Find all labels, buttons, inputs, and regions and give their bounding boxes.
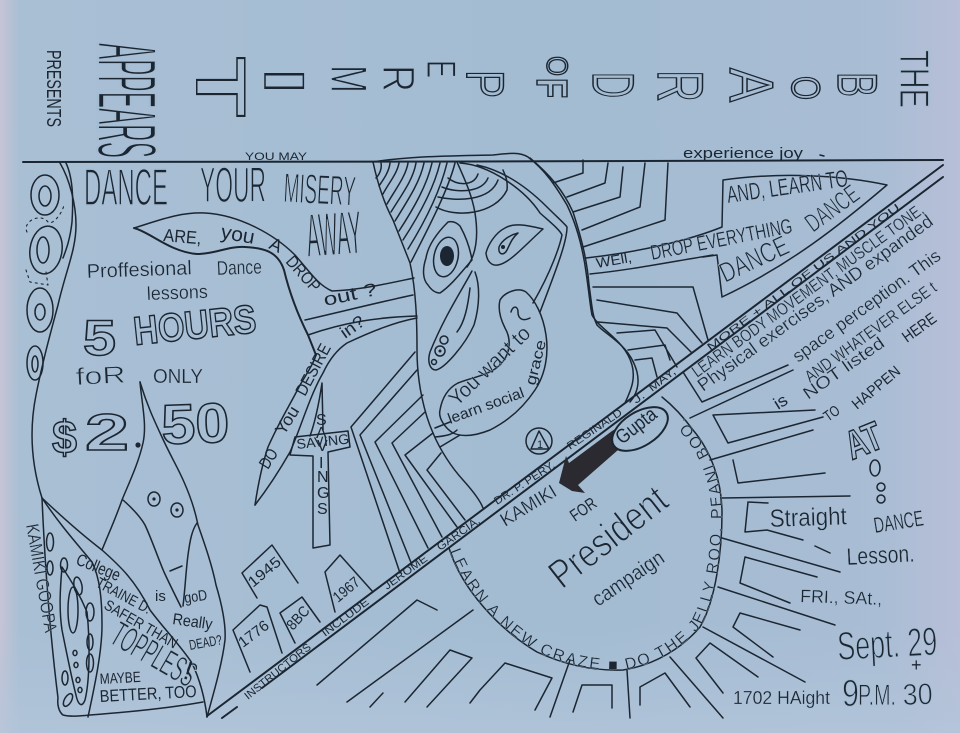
heading: dance your misery away [84,157,364,271]
arrow banner: and learn to dance dance: DANCE [714,229,794,288]
text: for only: foR [75,361,126,391]
face: contour [373,153,638,508]
fish-shaped banner: are you a drop out: ARE, [163,225,202,248]
text: is god really dead [155,587,223,653]
title: The Board of Permit Appears, written sideways: R [373,65,424,92]
text: straight dance lesson: Lesson. [846,540,915,571]
text: is god really dead: Really [171,611,213,634]
text: presents: PRESENTS [42,50,64,127]
text: straight dance lesson: Straight [769,502,847,533]
lines from blob to chin [435,422,460,447]
heading: dance your misery away: DANCE [84,159,168,217]
triangle panel with pods and text: College [74,550,123,585]
triangle panel with pods and text: MAYBE [99,669,141,688]
text: dates and address: 1702 HAight [733,688,830,708]
text: 5 hours: 5 [83,310,116,366]
fish-shaped banner: are you a drop out: DROP [282,252,324,296]
text: 5 hours [83,297,258,366]
diagonal band outline [207,165,943,718]
triangle panel with pods and text: TRAINE D. [93,575,154,618]
face: left eye [424,222,472,293]
cross: savings: SAVING [296,431,350,452]
text: kamiki for president campaign: campaign [588,546,669,611]
triangle panel with pods and text [42,498,207,717]
price: $2.50: 2 [85,404,129,462]
speech blob: you want to learn social grace [440,290,550,435]
text: dates and address: 30 [902,678,933,712]
text: dates and address [733,586,938,715]
band text: instructors: DR. P. PERY, [492,459,557,508]
tombstones with years [233,545,373,672]
circle campaign outline and jelly roo text: LEARN A NEW CRAZE ■ DO THE JELLY ROO. PEANI BOO. [450,418,722,670]
arrow banner: and learn to dance dance: WEll, [595,249,633,271]
face: nose strip [429,271,479,370]
band text: instructors: REGINALD [565,407,625,452]
top rule with "you may experience joy": experience joy [683,145,804,162]
fish-shaped banner: are you a drop out: out ? [322,279,379,310]
title: The Board of Permit Appears, written sideways: M [319,65,377,93]
price: $2.50: $ [52,411,77,463]
text block: learn body movement: space perception. This [789,245,944,366]
face: right eye [486,225,543,265]
text: is god really dead: DEAD? [188,631,223,653]
text: at with circles [839,414,889,503]
arrow banner: and learn to dance dance: DANCE [799,178,865,238]
band text: instructors: INSTRUCTORS [242,641,314,702]
heading: dance your misery away: YOUR [200,157,266,213]
triangle panel with pods and text: ! [180,655,196,686]
title: The Board of Permit Appears, written sideways: A [716,68,785,103]
text block: learn body movement: is [770,390,791,413]
face: forehead arcs [436,162,507,267]
fish-shaped banner: are you a drop out [134,213,417,355]
triangle panel with pods and text: SAFER THAN [101,597,181,652]
speech blob: you want to learn social grace: You want to [444,322,535,411]
text: kamiki for president campaign: KAMIKI [497,481,561,531]
triangle panel with pods and text: BETTER, TOO [99,682,197,706]
text: for only [75,361,203,391]
branch: do you desire in: DESIRE [292,341,335,399]
cross: savings: SAVINGS [316,412,329,518]
text: 5 hours: HOURS [131,297,258,354]
medallion: triangle with 1: 1 [537,439,543,451]
tombstones with years: 8BC. [283,600,316,634]
text: kamiki for president campaign: President [540,477,676,597]
rays around circle [317,365,850,718]
text: dates and address: FRI., SAt., [800,586,883,609]
text: kamiki for president campaign [497,477,676,611]
text block: learn body movement: TO [821,402,843,425]
text block: learn body movement: NOT listed [799,333,888,403]
band text: instructors: J. [631,390,647,406]
title: The Board of Permit Appears, written sideways: P [455,70,514,98]
text: kamiki goopa: KAMIKI GOOPA [22,522,61,634]
title: The Board of Permit Appears, written sideways: F [527,78,576,98]
stripes right of face, upper [553,160,668,247]
branch: do you desire in [255,312,417,505]
stripes right of face, lower [593,287,708,377]
text: at with circles: AT [839,414,889,468]
face: hair hatching [376,163,455,262]
leaf figure with eyes [102,382,225,717]
big left contour [32,163,76,498]
left ovals column [26,175,65,380]
branch: do you desire in: DO [255,445,282,472]
band text: instructors [242,202,902,702]
arrow banner: and learn to dance dance: DROP EVERYTHING [649,215,794,265]
text: professional dance lessons: Dance [216,256,262,280]
title: The Board of Permit Appears, written sideways: T [182,57,260,117]
text: AWAY [304,198,364,271]
text: straight dance lesson [769,502,925,571]
band text: instructors: MAY, [646,366,678,394]
arrow banner: and learn to dance dance [586,165,887,297]
tombstones with years: 1967 [330,574,364,606]
tombstones with years: 1776 [235,617,273,651]
speech blob: you want to learn social grace: learn social [446,384,527,428]
title: The Board of Permit Appears, written sideways: O [540,56,573,76]
top rule with "you may experience joy": YOU MAY [245,151,308,163]
band text: instructors: INCLUDE [320,596,372,639]
price: $2.50: 50 [160,391,230,456]
fish-shaped banner: are you a drop out: A [266,233,286,257]
text: dates and address: 9 [842,673,859,715]
text: dates and address: + [911,655,922,675]
band text: instructors: GARCIA, [435,515,483,553]
text: professional dance lessons: Proffesional [86,257,192,283]
stripes left of face [351,352,465,573]
speech blob: you want to learn social grace: grace [522,338,550,387]
branch: do you desire in: in? [336,312,369,342]
text: dates and address: P.M. [858,679,896,712]
title: The Board of Permit Appears, written sideways: B [826,72,889,97]
text: professional dance lessons [86,256,262,305]
text block: learn body movement: HERE [899,310,940,346]
cross: savings [290,383,350,548]
title: The Board of Permit Appears, written sideways: R [644,70,717,102]
title: The Board of Permit Appears, written sideways: O [783,76,827,100]
title: The Board of Permit Appears, written sideways: THE [891,50,938,108]
title: The Board of Permit Appears, written sideways [80,43,938,158]
branch: do you desire in: You [271,403,303,438]
top rule with "you may experience joy" [23,145,943,163]
text: is god really dead: is [155,588,166,605]
arrow banner: and learn to dance dance: AND, LEARN TO [725,165,850,209]
text: for only: ONLY [153,366,203,388]
text: kamiki for president campaign: FOR [566,494,600,525]
black arrow [559,424,624,493]
text block: learn body movement: HAPPEN [849,363,904,413]
medallion: triangle with 1 [526,428,552,454]
text: is god really dead: goD [183,587,208,607]
text: professional dance lessons: lessons [146,282,208,305]
text: APPEARS [80,43,174,158]
text block: learn body movement: Physical exercises, AND expanded [694,211,937,395]
tombstones with years: 1945 [245,554,285,591]
oval: gupta: Gupta [612,403,662,449]
band text: instructors: MORE + ALL OF US AND YOU [705,202,902,353]
oval: gupta [605,398,675,460]
band text: instructors: JEROME [382,553,430,592]
text: straight dance lesson: DANCE [872,505,925,538]
fish-shaped banner: are you a drop out: you [219,221,256,249]
face: nose lines [460,163,567,312]
heading: dance your misery away: MISERY [283,164,357,215]
price: $2.50 [52,391,230,463]
title: The Board of Permit Appears, written sideways: E [418,60,465,78]
title: The Board of Permit Appears, written sideways: I [253,68,316,94]
title: The Board of Permit Appears, written sideways: D [580,72,645,98]
